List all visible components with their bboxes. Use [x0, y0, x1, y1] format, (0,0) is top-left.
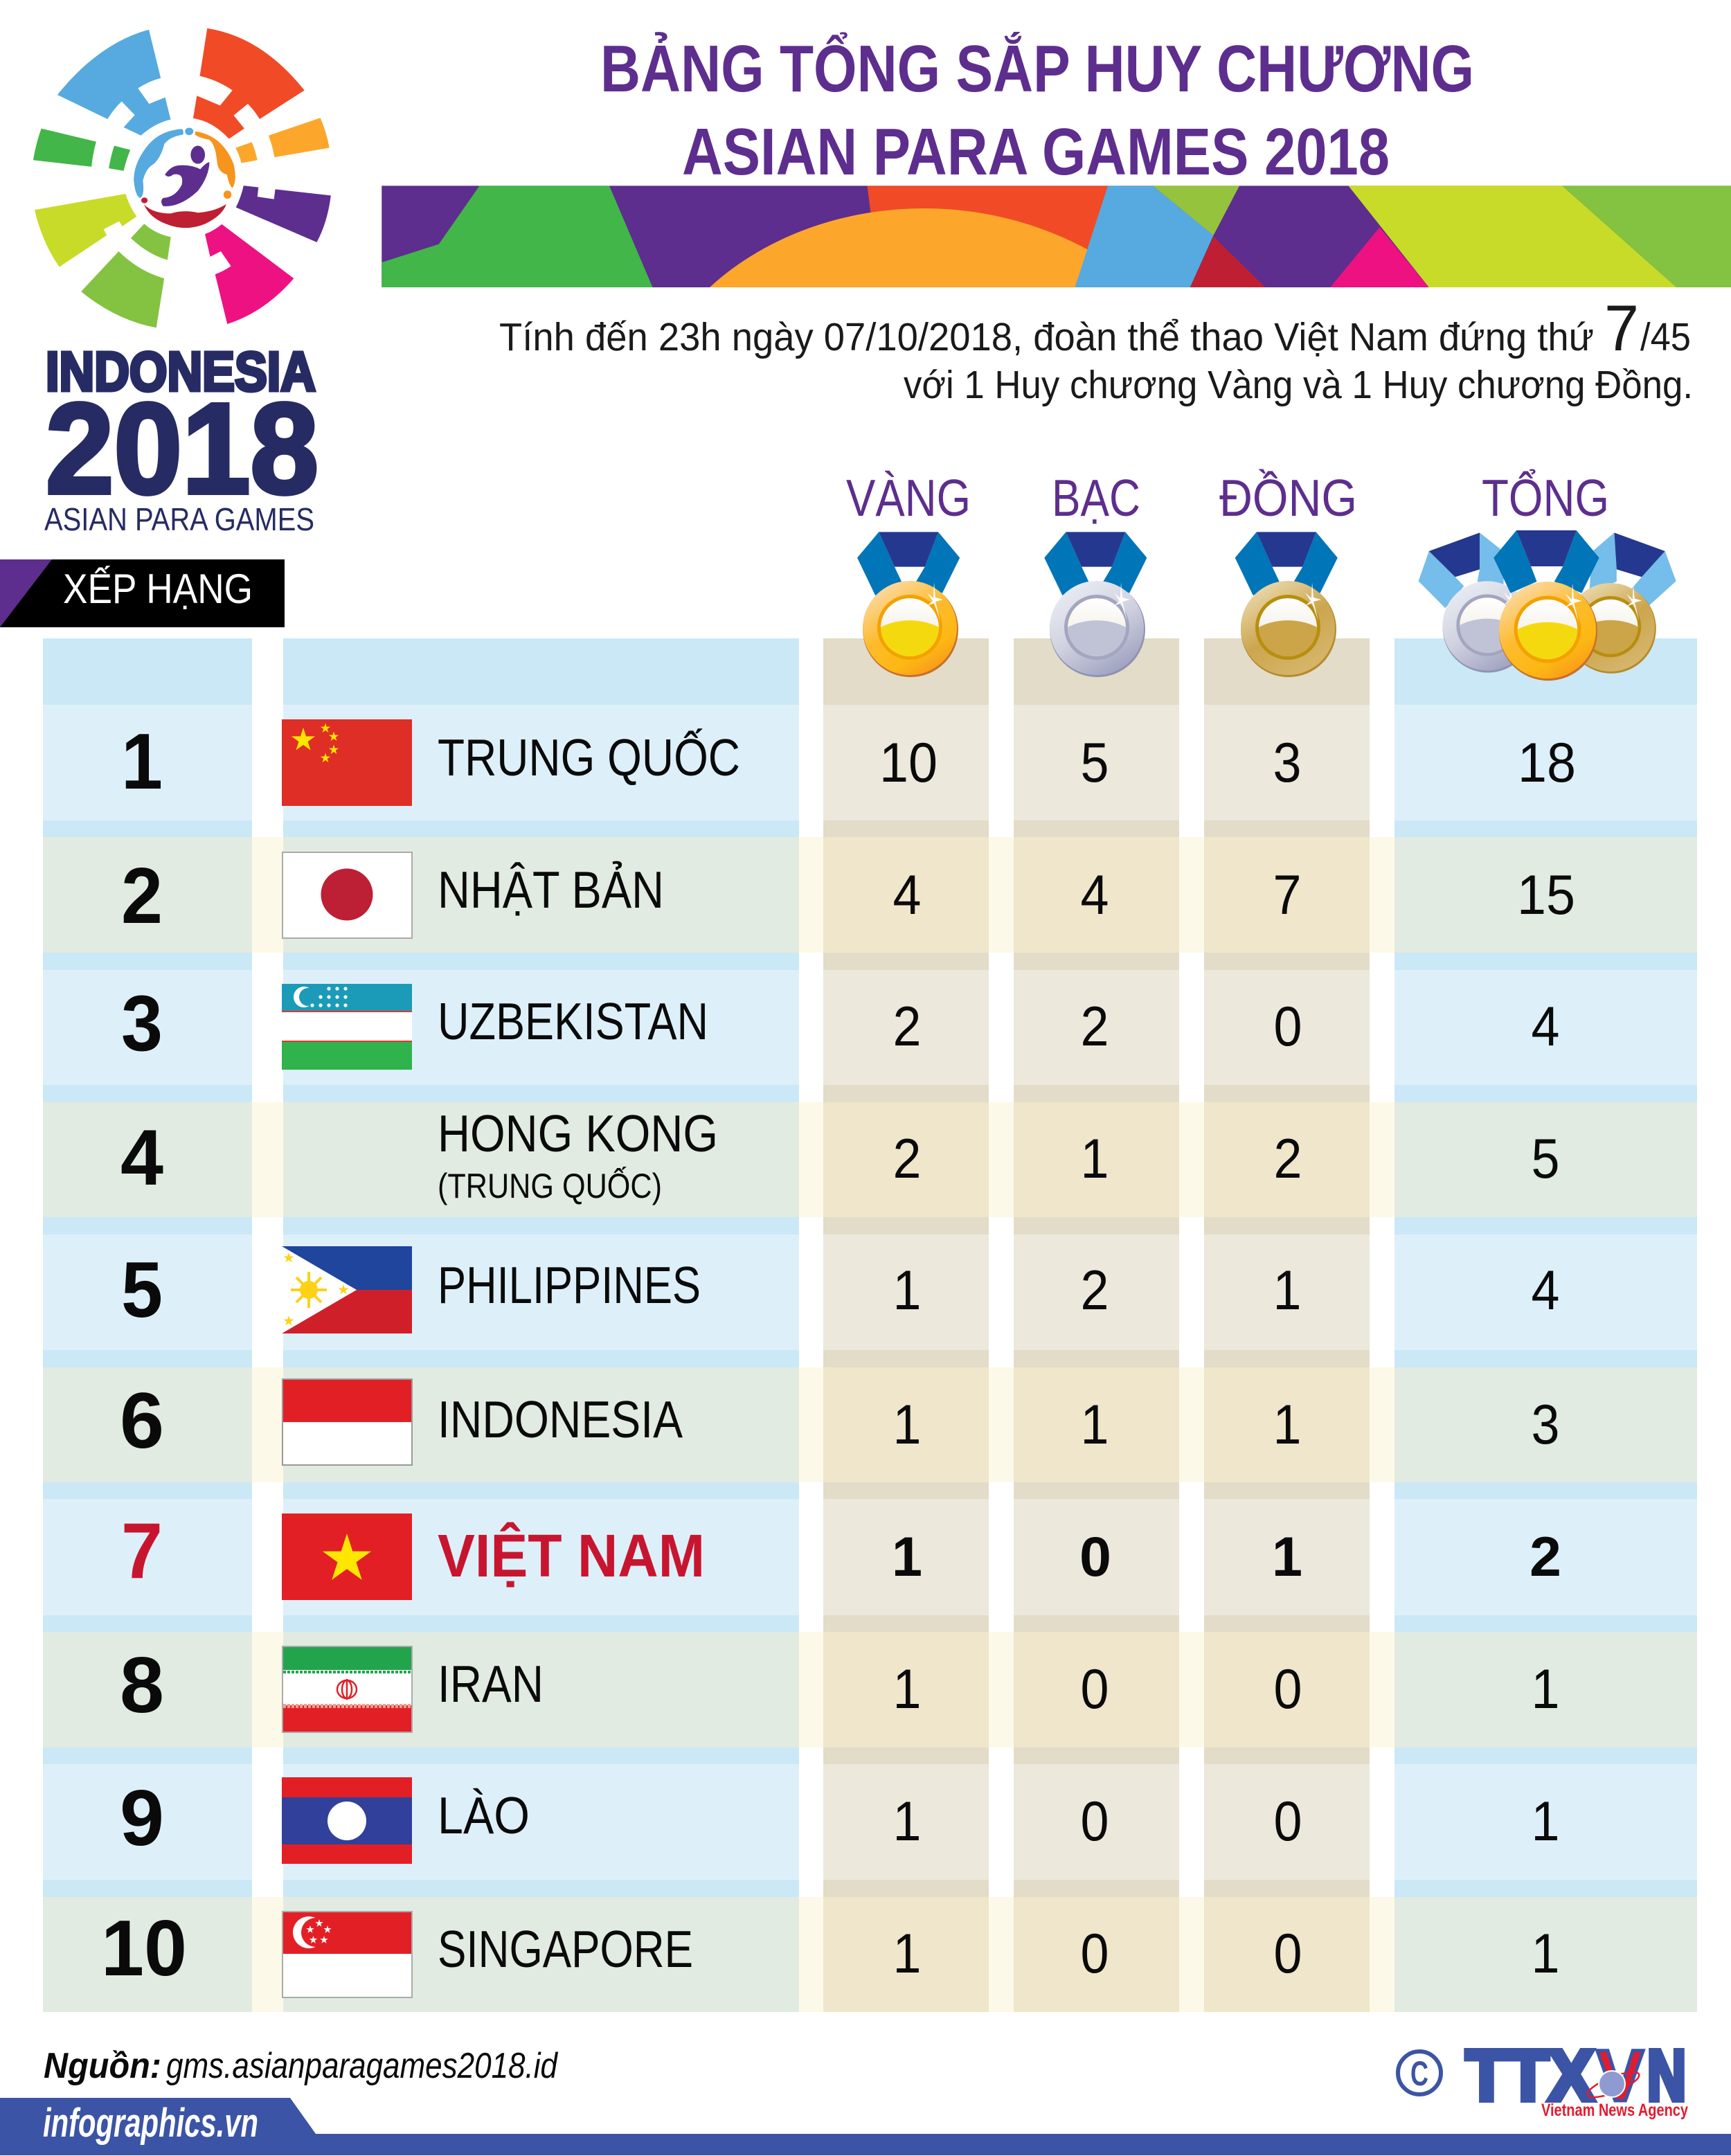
row 6: Indonesia: 1 [1080, 1394, 1109, 1456]
row 8: Iran: 1 [1532, 1658, 1559, 1721]
flag: Japan [282, 852, 412, 938]
row 3: Uzbekistan [121, 980, 1559, 1070]
row 7: Việt Nam: 0 [1079, 1526, 1111, 1588]
row 3: Uzbekistan: UZBEKISTAN [438, 992, 708, 1050]
row 8: Iran: IRAN [438, 1655, 544, 1713]
row 1: Trung Quốc: 5 [1080, 732, 1109, 794]
subtitle text: Tính đến 23h ngày 07/10/2018, đoàn thể thao Việt Nam đứng thứ [499, 315, 1594, 359]
row 5: Philippines: 1 [893, 1259, 921, 1322]
row 3: Uzbekistan: 2 [893, 996, 921, 1058]
column header: VÀNG [846, 469, 971, 690]
TTXVN logo: N [1647, 2036, 1686, 2115]
row 1: Trung Quốc [121, 718, 1576, 806]
row 7: Việt Nam: 7 [121, 1507, 163, 1595]
row 4: Hong Kong: HONG KONG [438, 1104, 718, 1162]
flag: Iran [282, 1646, 412, 1732]
colourful banner [382, 186, 1731, 287]
row 7: Việt Nam [121, 1507, 1561, 1600]
row 8: Iran: 0 [1080, 1658, 1109, 1721]
row 9: Lào: 1 [893, 1790, 921, 1853]
row 5: Philippines: 2 [1080, 1259, 1109, 1322]
row 10: Singapore: 1 [1532, 1923, 1559, 1985]
row 4: Hong Kong: 5 [1532, 1128, 1559, 1190]
row 3: Uzbekistan: 3 [121, 980, 163, 1068]
source note: gms.asianparagames2018.id [166, 2046, 559, 2086]
flag: Philippines [282, 1246, 412, 1333]
row 6: Indonesia: 3 [1532, 1394, 1559, 1456]
row 4: Hong Kong: 2 [893, 1128, 921, 1190]
table background [0, 638, 1731, 2012]
row 10: Singapore: 1 [893, 1923, 921, 1985]
TTXVN logo: V [1597, 2036, 1644, 2117]
TTXVN logo: TTX [1466, 2036, 1594, 2115]
row 2: Nhật Bản: NHẬT BẢN [438, 861, 664, 919]
logo emblem [33, 28, 331, 327]
row 9: Lào: 9 [120, 1775, 164, 1862]
row 8: Iran: 0 [1274, 1658, 1302, 1721]
row 8: Iran: 1 [893, 1658, 921, 1721]
row 2: Nhật Bản: 2 [121, 852, 163, 940]
row 1: Trung Quốc: 10 [879, 732, 938, 794]
row 10: Singapore [101, 1905, 1559, 1997]
icon: three medals [1419, 530, 1676, 694]
row 9: Lào: 0 [1274, 1790, 1302, 1853]
row 5: Philippines: 4 [1532, 1259, 1559, 1322]
row 5: Philippines: 5 [121, 1246, 163, 1334]
title [600, 31, 1474, 189]
row 4: Hong Kong [120, 1104, 1559, 1205]
row 9: Lào: 0 [1080, 1790, 1109, 1853]
flag: Singapore [282, 1912, 412, 1997]
column header: TỔNG [1419, 469, 1676, 694]
icon: gold medal [857, 532, 960, 690]
row 10: Singapore: 0 [1080, 1923, 1109, 1985]
row 6: Indonesia: 6 [120, 1377, 164, 1465]
row 2: Nhật Bản [121, 852, 1575, 940]
subtitle text: /45 [1640, 315, 1691, 359]
column header: VÀNG: VÀNG [846, 469, 971, 527]
source note: Nguồn: [44, 2046, 161, 2086]
row 6: Indonesia [120, 1377, 1559, 1465]
row 1: Trung Quốc: 3 [1273, 732, 1302, 794]
row 9: Lào: LÀO [438, 1786, 530, 1844]
column header: ĐỒNG [1219, 469, 1357, 690]
flag: Indonesia [282, 1379, 412, 1465]
row 9: Lào: 1 [1532, 1790, 1559, 1853]
row 10: Singapore: SINGAPORE [438, 1920, 693, 1978]
row 1: Trung Quốc: 1 [121, 718, 163, 806]
column header: BẠC [1044, 469, 1147, 690]
row 6: Indonesia: 1 [893, 1394, 921, 1456]
row 9: Lào [120, 1775, 1559, 1864]
row 8: Iran: 8 [120, 1642, 164, 1730]
footer bar: infographics.vn [43, 2101, 258, 2146]
row 2: Nhật Bản: 15 [1517, 864, 1575, 926]
row 1: Trung Quốc: TRUNG QUỐC [438, 728, 740, 787]
row 8: Iran [120, 1642, 1559, 1732]
flag: Vietnam [282, 1513, 412, 1600]
column header: ĐỒNG: ĐỒNG [1219, 469, 1357, 527]
row 3: Uzbekistan: 0 [1274, 996, 1302, 1058]
row 2: Nhật Bản: 7 [1273, 864, 1302, 926]
footer bar [0, 2098, 1731, 2155]
row 7: Việt Nam: 2 [1530, 1526, 1561, 1588]
row 6: Indonesia: 1 [1273, 1394, 1302, 1456]
title: BẢNG TỔNG SẮP HUY CHƯƠNG [600, 31, 1474, 106]
row 10: Singapore: 10 [101, 1905, 187, 1993]
row 4: Hong Kong: 2 [1274, 1128, 1302, 1190]
flag: Laos [282, 1777, 412, 1864]
icon: silver medal [1044, 532, 1147, 690]
title: ASIAN PARA GAMES 2018 [682, 115, 1390, 189]
row 3: Uzbekistan: 4 [1532, 996, 1559, 1058]
subtitle text: với 1 Huy chương Vàng và 1 Huy chương Đồng. [904, 363, 1693, 407]
TTXVN logo [1466, 2036, 1688, 2120]
flag: Uzbekistan [282, 984, 412, 1070]
row 1: Trung Quốc: 18 [1518, 732, 1576, 794]
logo text 2018: 2018 [46, 377, 319, 521]
label: XẾP HẠNG: XẾP HẠNG [63, 566, 253, 612]
row 4: Hong Kong: (TRUNG QUỐC) [438, 1166, 662, 1205]
row 4: Hong Kong: 1 [1080, 1128, 1109, 1190]
TTXVN logo: Vietnam News Agency [1541, 2101, 1688, 2120]
logo: Indonesia 2018 Asian Para Games [33, 28, 331, 537]
row 4: Hong Kong: 4 [120, 1114, 163, 1202]
row 2: Nhật Bản: 4 [1080, 864, 1109, 926]
row 6: Indonesia: INDONESIA [438, 1390, 683, 1448]
row 5: Philippines: 1 [1273, 1259, 1302, 1322]
subtitle text: 7 [1604, 291, 1639, 364]
copyright mark: C [1410, 2054, 1428, 2093]
copyright mark [1398, 2051, 1441, 2094]
subtitle text [499, 291, 1693, 407]
label: XẾP HẠNG [0, 559, 285, 627]
logo text INDONESIA: INDONESIA [46, 341, 316, 402]
source note [44, 2046, 559, 2086]
row 5: Philippines: PHILIPPINES [438, 1256, 701, 1314]
row 7: Việt Nam: 1 [892, 1526, 922, 1588]
row 2: Nhật Bản: 4 [893, 864, 921, 926]
logo text ASIAN PARA GAMES: ASIAN PARA GAMES [44, 501, 314, 537]
row 10: Singapore: 0 [1274, 1923, 1302, 1985]
row 3: Uzbekistan: 2 [1080, 996, 1109, 1058]
icon: bronze medal [1235, 532, 1338, 690]
flag: China [282, 719, 412, 806]
row 5: Philippines [121, 1246, 1559, 1334]
row 7: Việt Nam: 1 [1272, 1526, 1302, 1588]
column header: BẠC: BẠC [1052, 469, 1140, 527]
column header: TỔNG: TỔNG [1482, 469, 1609, 527]
row 7: Việt Nam: VIỆT NAM [438, 1522, 705, 1590]
